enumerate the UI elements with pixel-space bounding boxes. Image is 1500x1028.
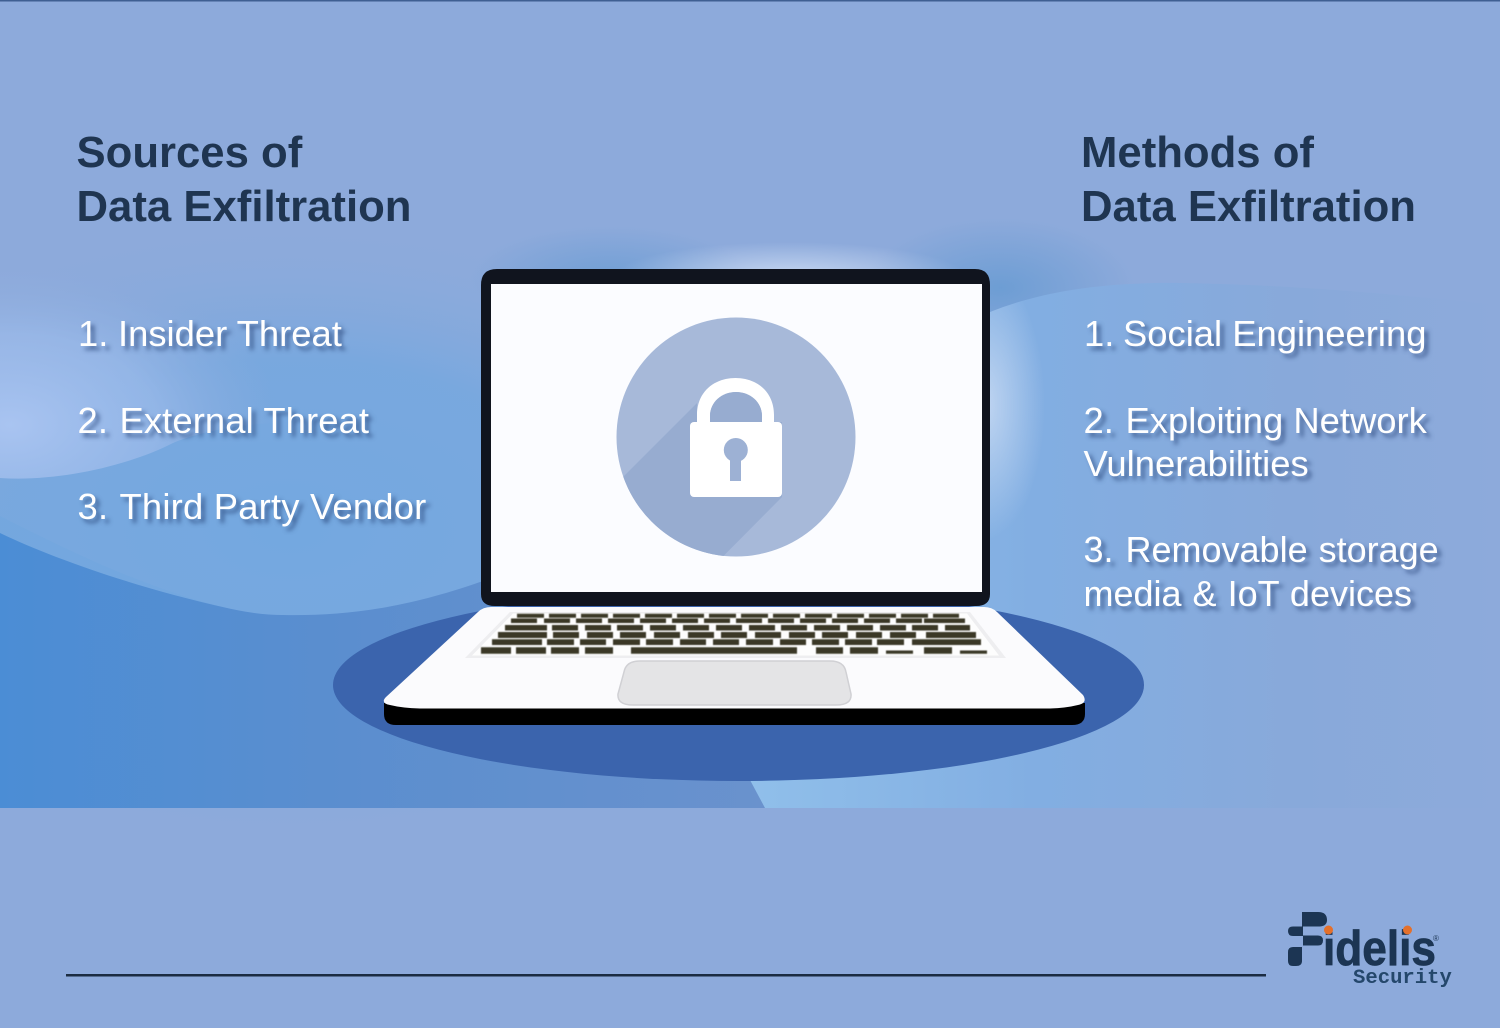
laptop: [384, 269, 1085, 725]
source 3: 3.: [78, 486, 108, 527]
source 2: External Threat: [120, 400, 369, 441]
method 2: Exploiting Network Vulnerabilities: [1084, 400, 1427, 484]
logo mark: [1288, 912, 1327, 966]
logo dots: [1324, 926, 1412, 934]
background wave: mid blue left: [0, 220, 830, 840]
list: sources of exfiltration: [78, 313, 432, 532]
source 3: Third Party Vendor: [120, 486, 427, 527]
logo registered mark: ®: [1433, 934, 1439, 943]
laptop shadow ellipse: [333, 589, 1144, 781]
method 3: Removable storage media & IoT devices: [1084, 529, 1439, 614]
keyboard tray: [465, 612, 1006, 658]
method 3: 3.: [1084, 529, 1114, 570]
heading: sources: Sources of Data Exfiltration: [76, 128, 412, 231]
method 1: Social Engineering: [1123, 313, 1426, 354]
logo wordmark: idelis: [1323, 922, 1436, 976]
lock badge: [616, 318, 856, 556]
method 1: 1.: [1084, 313, 1114, 354]
padlock: [690, 378, 782, 497]
keyboard keys: [481, 614, 987, 654]
logo tagline: Security: [1353, 967, 1452, 990]
list: methods of exfiltration: [1084, 313, 1443, 614]
background wave: light patch left: [0, 318, 230, 478]
heading: methods: Methods of Data Exfiltration: [1081, 128, 1416, 231]
method 2: 2.: [1084, 400, 1114, 441]
background wave: faint band left: [0, 516, 227, 640]
background wave: right: [750, 283, 1162, 808]
source 1: Insider Threat: [118, 313, 342, 354]
background wave: dark blue lower left: [0, 500, 800, 808]
source 1: 1.: [78, 313, 108, 354]
top edge line: [0, 0, 1500, 2]
trackpad: [618, 661, 851, 705]
laptop base deck: [384, 607, 1085, 708]
footer rule: [66, 974, 1266, 976]
glow above laptop: [470, 218, 1135, 358]
laptop screen bezel: [481, 269, 990, 606]
laptop screen: [491, 284, 982, 592]
laptop base side: [384, 703, 1085, 725]
source 2: 2.: [78, 400, 108, 441]
logo: Fidelis Security: [1288, 912, 1452, 990]
